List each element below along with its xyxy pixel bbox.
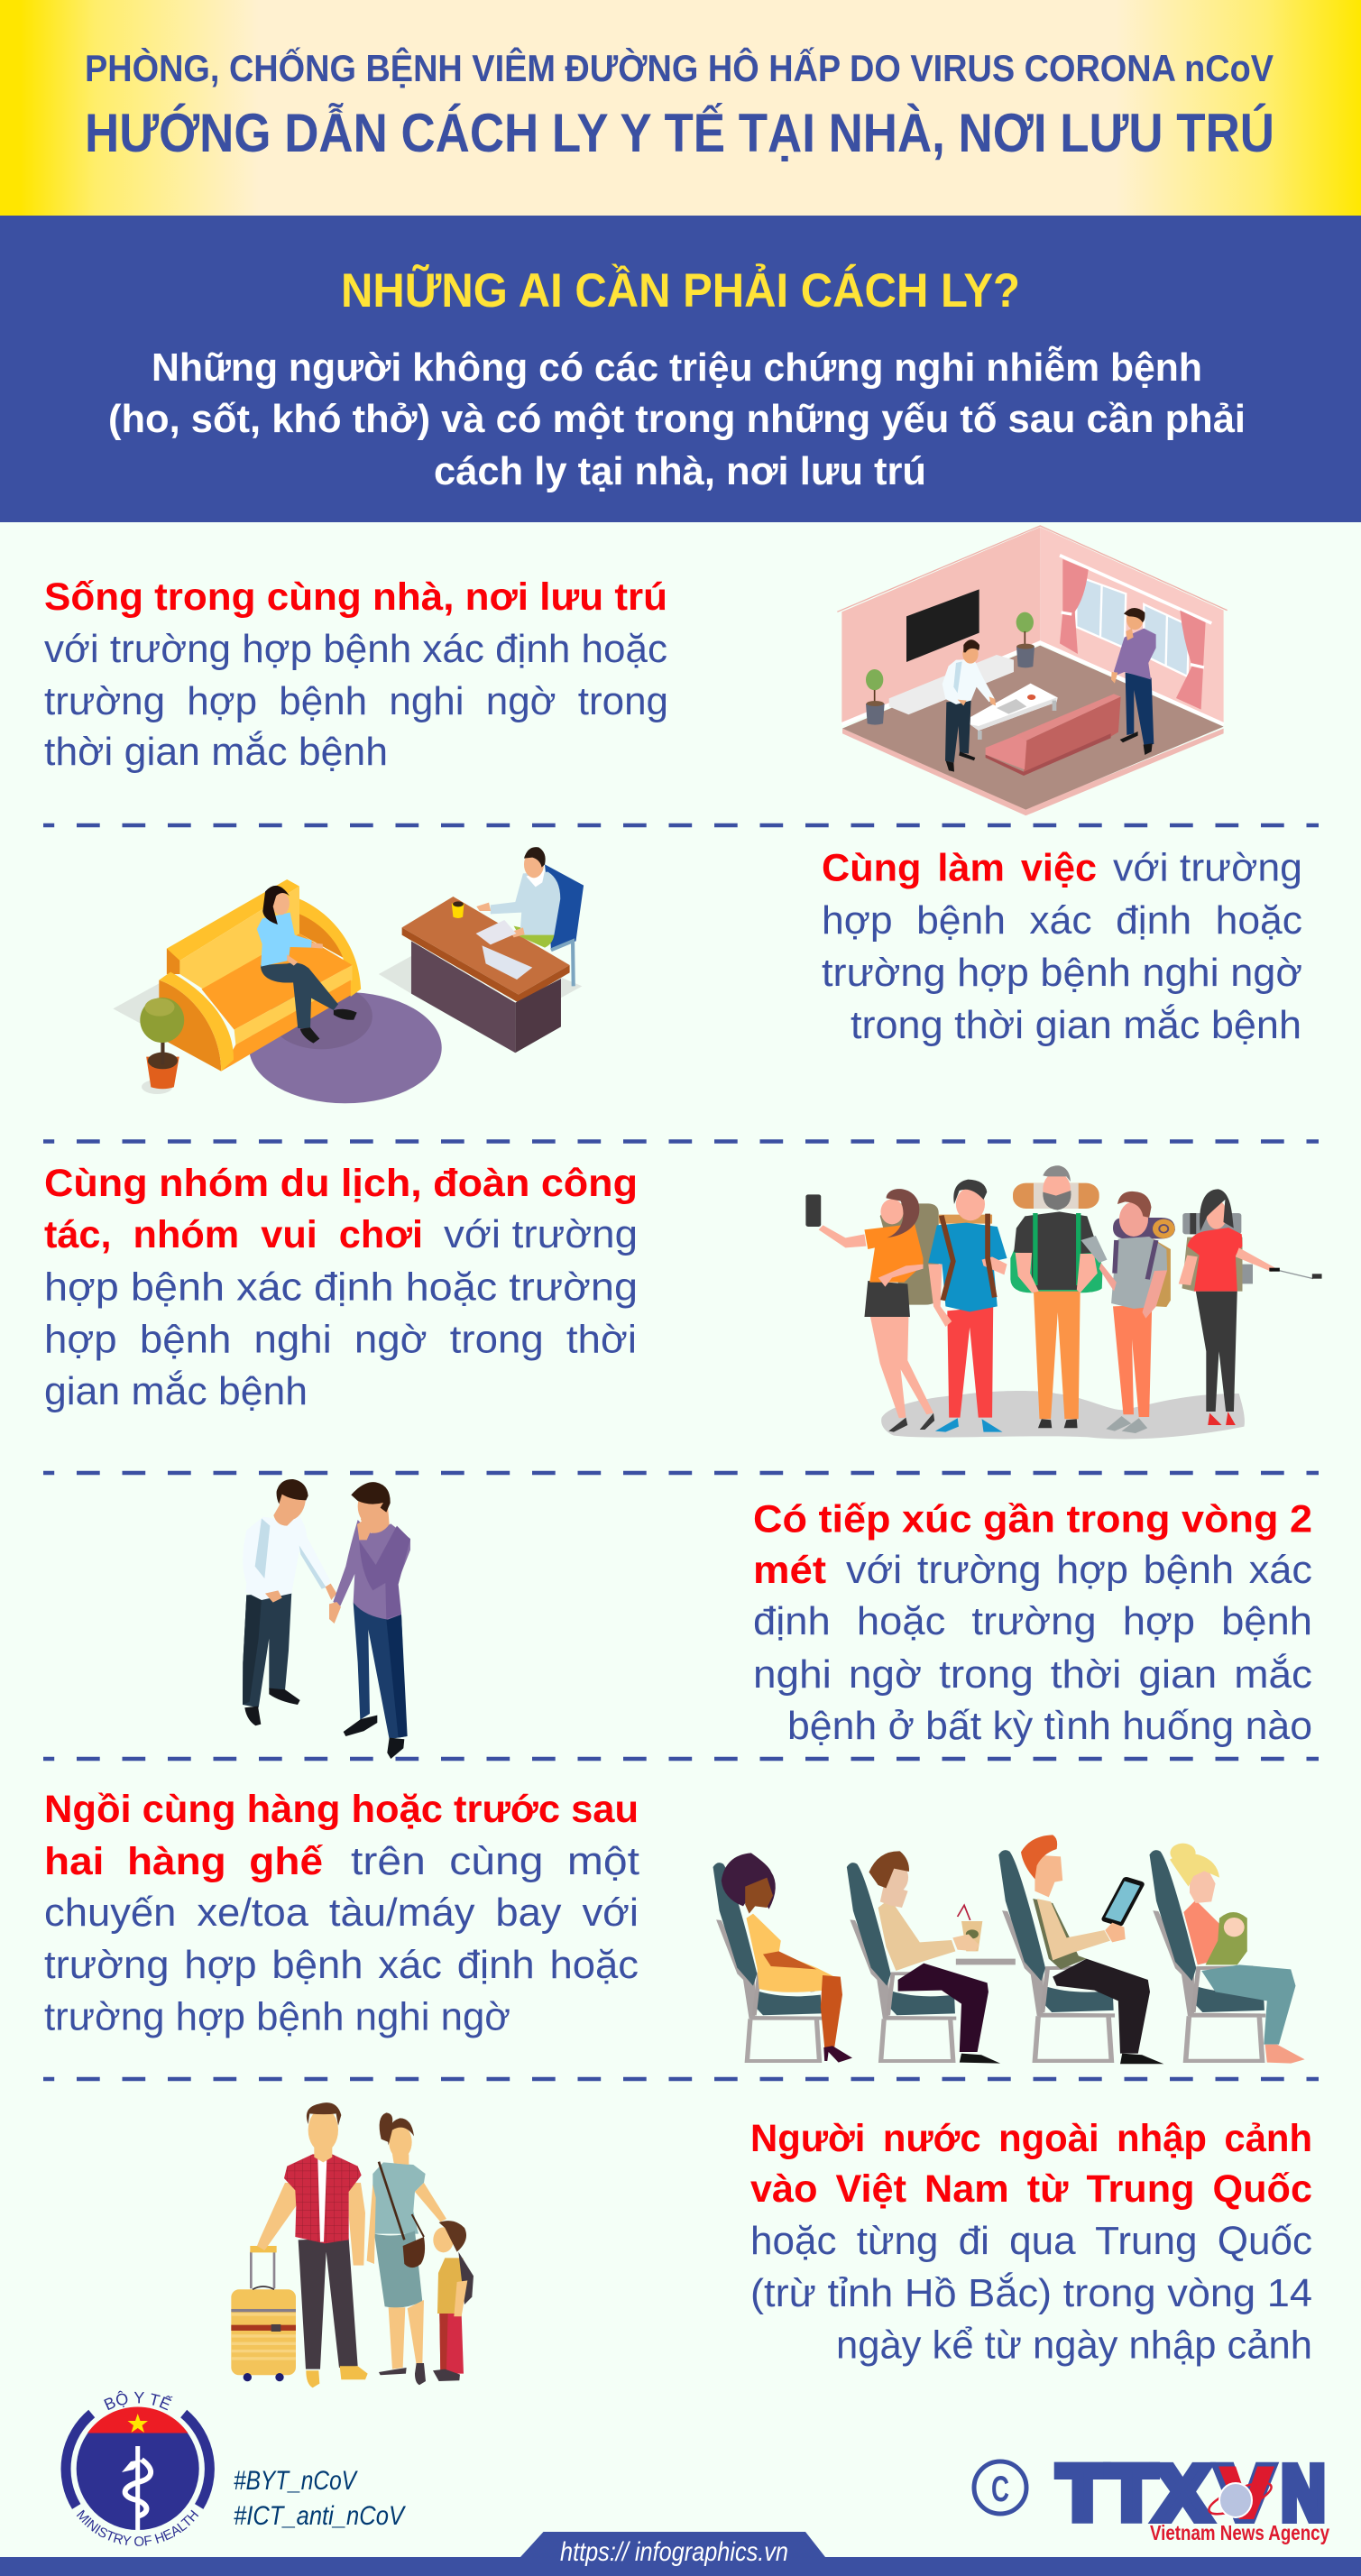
text: same house: với trường hợp bệnh xác định hoặc	[44, 627, 667, 671]
logo: Ministry of Health: MINISTRY OF HEALTH	[76, 2509, 198, 2546]
text: same workplace: trong thời gian mắc bệnh	[851, 1003, 1301, 1047]
illustration: living room	[837, 526, 1228, 815]
text: close contact	[753, 1497, 1312, 1748]
text: same workplace	[822, 846, 1302, 1047]
text: same row seats: hai hàng ghế	[44, 1840, 323, 1883]
copyright symbol: C	[991, 2470, 1009, 2509]
website url: https:// infographics.vn	[560, 2537, 788, 2567]
text: same row seats: Ngồi cùng hàng hoặc trước sau	[44, 1788, 639, 1831]
text: foreigners entering: vào Việt Nam từ Trung Quốc	[750, 2167, 1312, 2211]
panel: same travel group	[44, 1162, 1322, 1439]
logo: TTXVN	[1058, 2451, 1329, 2544]
logo: Ministry of Health: BỘ Y TẾ	[104, 2390, 173, 2410]
text: foreigners entering: (trừ tỉnh Hồ Bắc) trong vòng 14	[750, 2271, 1312, 2315]
text: same travel group: gian mắc bệnh	[44, 1369, 308, 1413]
text: same row seats: chuyến xe/toa tàu/máy bay với	[44, 1891, 639, 1935]
text: same row seats: trường hợp bệnh xác định hoặc	[44, 1943, 639, 1987]
text: same travel group: hợp bệnh nghi ngờ trong thời	[44, 1317, 637, 1362]
text: same workplace: Cùng làm việc	[822, 846, 1097, 889]
text: foreigners entering: Người nước ngoài nhập cảnh	[750, 2117, 1312, 2160]
text: same travel group: hợp bệnh xác định hoặc trường	[44, 1265, 638, 1310]
panel: same workplace	[113, 846, 1302, 1103]
text: foreigners entering: ngày kể từ ngày nhập cảnh	[836, 2323, 1312, 2367]
illustration: travellers	[805, 1165, 1322, 1439]
logo: Ministry of Health	[61, 2390, 215, 2546]
intro text: cách ly tại nhà, nơi lưu trú	[434, 449, 926, 493]
intro text	[108, 345, 1246, 493]
logo: TTXVN: V	[1222, 2455, 1271, 2532]
logo: TTXVN: TTX	[1058, 2451, 1209, 2535]
text: same house: thời gian mắc bệnh	[44, 730, 388, 774]
illustration: family with suitcase	[231, 2102, 474, 2387]
text: foreigners entering: hoặc từng đi qua Trung Quốc	[750, 2219, 1312, 2263]
panel: close contact	[243, 1479, 1312, 1759]
text: same house: trường hợp bệnh nghi ngờ trong	[44, 679, 668, 723]
header banner	[0, 0, 1361, 216]
text: foreigners entering	[750, 2117, 1312, 2367]
text: same row seats: trường hợp bệnh nghi ngờ	[44, 1995, 510, 2038]
text: same travel group: tác, nhóm vui chơi	[44, 1213, 423, 1256]
text: close contact: bệnh ở bất kỳ tình huống nào	[787, 1704, 1312, 1748]
hashtags: #ICT_anti_nCoV	[234, 2501, 407, 2531]
panel: living in the same house	[44, 526, 1228, 815]
heading: question: NHỮNG AI CẦN PHẢI CÁCH LY?	[341, 263, 1020, 317]
text: close contact: định hoặc trường hợp bệnh	[753, 1599, 1312, 1643]
text: same workplace: hợp bệnh xác định hoặc	[822, 898, 1302, 943]
text: same travel group	[44, 1162, 638, 1413]
panel: foreigners entering	[231, 2102, 1312, 2387]
logo: TTXVN: V	[1217, 2451, 1273, 2535]
text: same workplace: với trường	[1113, 846, 1302, 889]
logo: TTXVN: N	[1282, 2451, 1325, 2535]
illustration: office	[113, 847, 584, 1103]
footer band with URL tab	[0, 2532, 1361, 2576]
illustration: passengers in seats	[713, 1835, 1305, 2064]
text: same house: Sống trong cùng nhà, nơi lưu trú	[44, 575, 667, 619]
text: same row seats: trên cùng một	[351, 1839, 639, 1883]
copyright symbol	[974, 2461, 1026, 2514]
panel: same row seats	[44, 1788, 1305, 2064]
intro text: (ho, sốt, khó thở) và có một trong những yếu tố sau cần phải	[108, 397, 1246, 441]
text: close contact: mét	[753, 1549, 826, 1592]
text: close contact: với trường hợp bệnh xác	[846, 1548, 1312, 1592]
text: close contact: nghi ngờ trong thời gian mắc	[753, 1652, 1312, 1697]
illustration: two men talking	[243, 1479, 410, 1759]
text: same travel group: Cùng nhóm du lịch, đoàn công	[44, 1162, 638, 1205]
text: same row seats	[44, 1788, 639, 2038]
intro text: Những người không có các triệu chứng nghi nhiễm bệnh	[152, 345, 1202, 390]
panel: who must quarantine	[0, 216, 1361, 522]
hashtags: #BYT_nCoV	[234, 2466, 358, 2496]
text: close contact: Có tiếp xúc gần trong vòng 2	[753, 1497, 1312, 1541]
hashtags	[234, 2466, 407, 2531]
text: same house	[44, 575, 668, 774]
text: same workplace: trường hợp bệnh nghi ngờ	[822, 951, 1302, 995]
text: same travel group: với trường	[444, 1212, 638, 1256]
